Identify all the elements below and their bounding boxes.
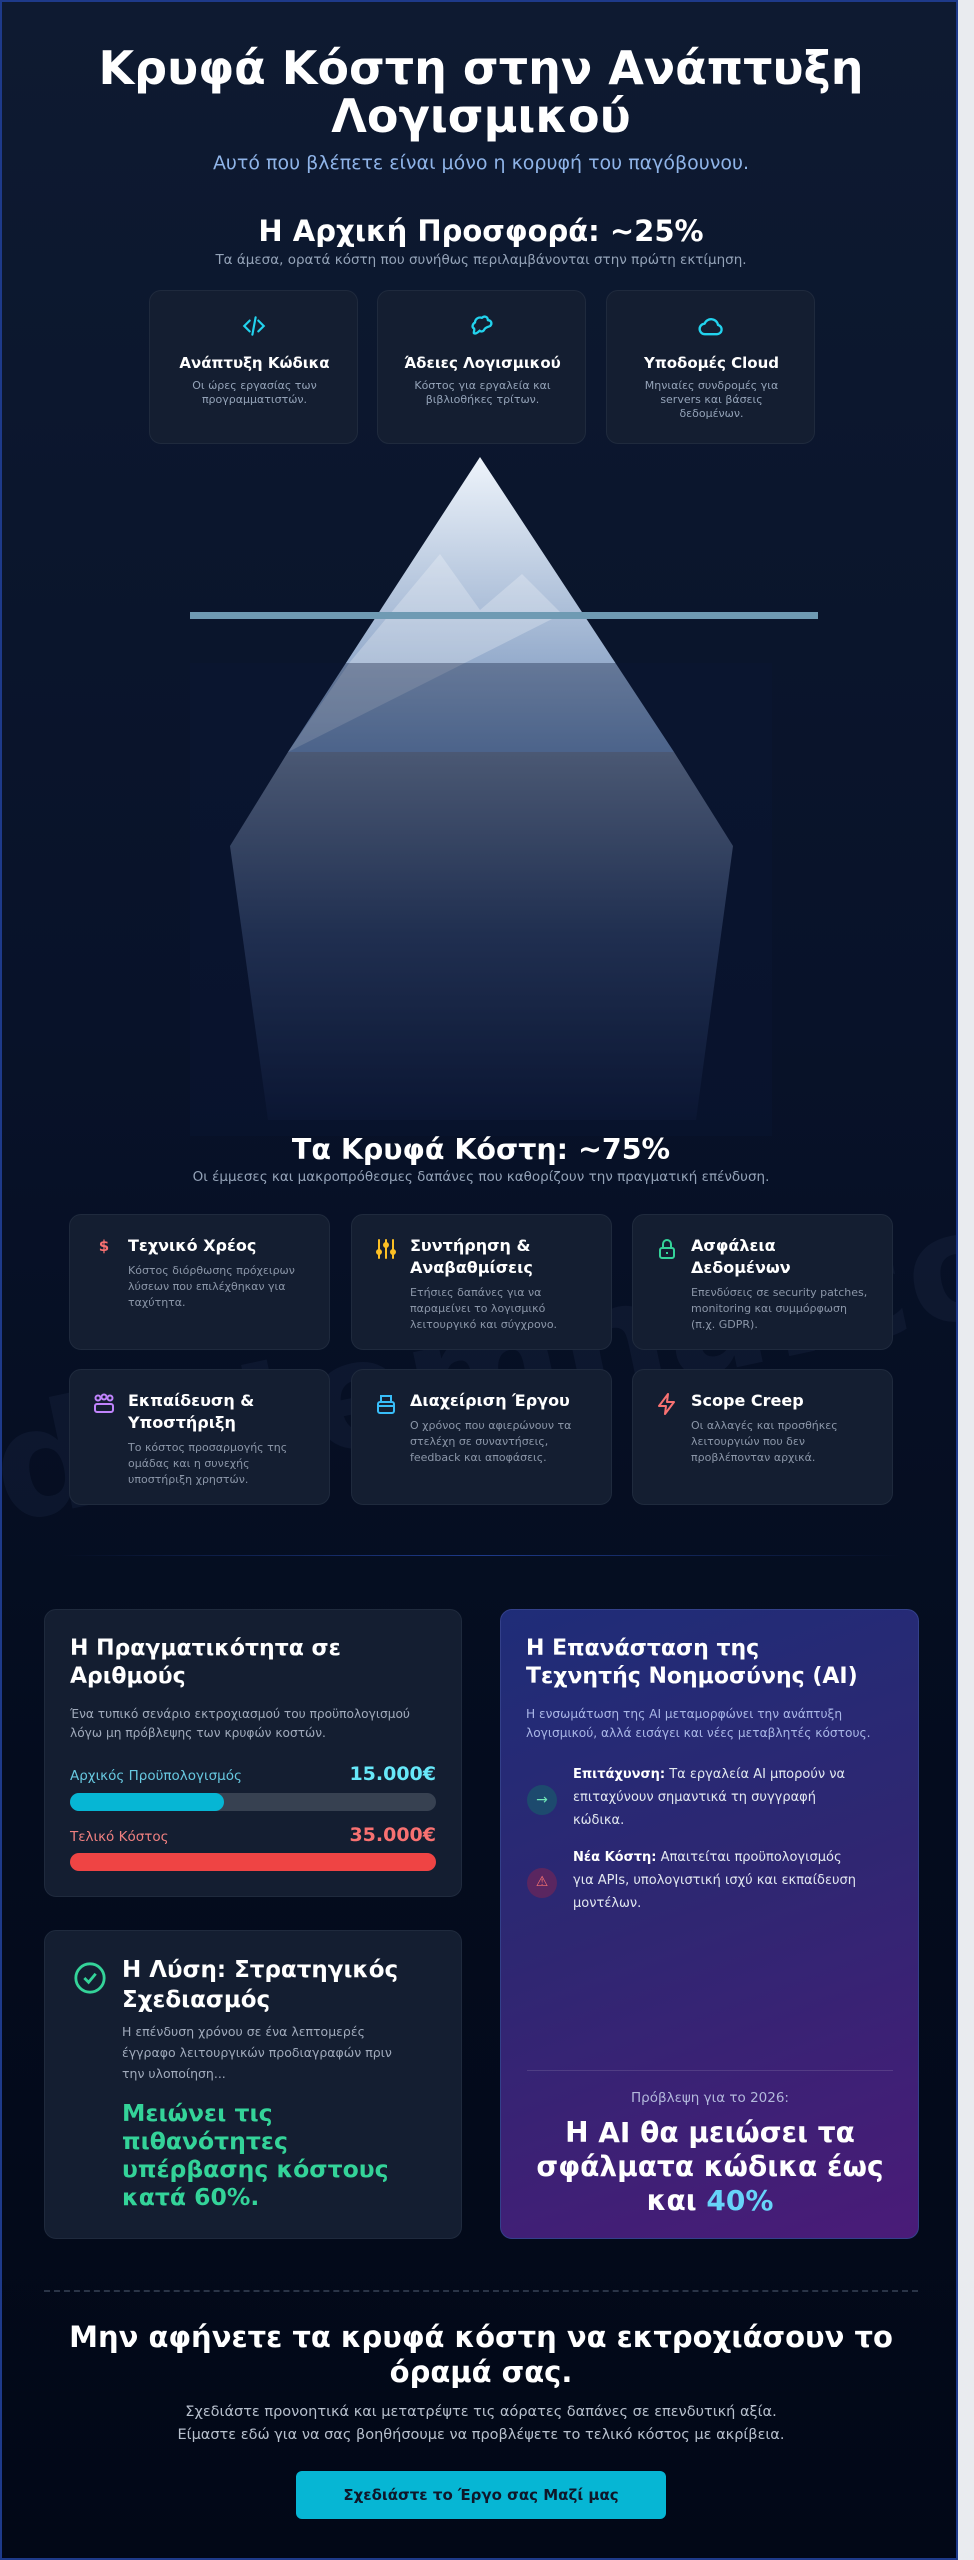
card: training: Υποστήριξη	[128, 1413, 236, 1432]
panel: visible costs cards	[149, 290, 815, 444]
card: technical debt: Κόστος διόρθωσης πρόχειρων	[128, 1264, 295, 1277]
card: project management: feedback και αποφάσεις.	[410, 1451, 547, 1464]
card: technical debt: λύσεων που επιλέχθηκαν για	[128, 1280, 286, 1293]
card: code: Οι ώρες εργασίας των προγραμματιστών.	[192, 379, 317, 406]
item: acceleration: Επιτάχυνση: Τα εργαλεία AI μπορούν να	[573, 1767, 845, 1782]
panel: solution: Μειώνει τις	[122, 2099, 273, 2127]
panel: solution: Σχεδιασμός	[122, 1987, 270, 2013]
heading: CTA: Μην αφήνετε τα κρυφά κόστη να εκτροχιάσουν το όραμά σας.	[69, 2320, 893, 2389]
card: training: υποστήριξη χρηστών.	[128, 1473, 248, 1486]
icon: check circle	[74, 1962, 106, 1994]
card: training	[69, 1369, 330, 1505]
title: Λογισμικού	[331, 89, 631, 143]
icon: box	[377, 1395, 395, 1414]
panel: reality in numbers	[44, 1609, 462, 1897]
card: project management	[351, 1369, 612, 1505]
panel: reality in numbers: Η Πραγματικότητα σε	[70, 1636, 341, 1661]
card: maintenance: Αναβαθμίσεις	[410, 1258, 533, 1277]
card: scope creep	[632, 1369, 893, 1505]
panel: AI revolution: λογισμικού, αλλά εισάγει και νέες μεταβλητές κόστους.	[526, 1726, 871, 1740]
card: maintenance: παραμείνει το λογισμικό	[410, 1302, 545, 1315]
card: security: Επενδύσεις σε security patches,	[691, 1286, 867, 1299]
icon: code	[242, 316, 266, 336]
text: CTA sub	[178, 2404, 784, 2443]
chart: iceberg	[190, 457, 818, 1120]
panel: hidden costs grid	[69, 1214, 893, 1505]
button: CTA	[296, 2471, 666, 2519]
bar chart: budget	[70, 1763, 436, 1871]
item: acceleration: →	[536, 1792, 548, 1808]
text: hidden costs sub: Οι έμμεσες και μακροπρόθεσμες δαπάνες που καθορίζουν την πραγματική επένδυση.	[193, 1169, 769, 1185]
panel: solution: υπέρβασης κόστους	[122, 2155, 389, 2183]
item: new costs: ⚠	[536, 1874, 548, 1890]
icon: users	[94, 1394, 114, 1413]
bar chart: budget: 15.000€	[349, 1763, 436, 1785]
card: technical debt	[69, 1214, 330, 1350]
text: CTA sub: Σχεδιάστε προνοητικά και μετατρέψτε τις αόρατες δαπάνες σε επενδυτική αξία.	[185, 2404, 777, 2420]
card: scope creep: Scope Creep	[691, 1391, 804, 1410]
item: acceleration: επιταχύνουν σημαντικά τη συγγραφή	[573, 1790, 816, 1805]
item: new costs: μοντέλων.	[573, 1896, 641, 1911]
panel: AI revolution: Η ενσωμάτωση της AI μεταμορφώνει την ανάπτυξη	[526, 1707, 842, 1721]
card: cloud: Μηνιαίες συνδρομές για servers και βάσεις δεδομένων.	[645, 379, 778, 420]
panel: reality in numbers: Ένα τυπικό σενάριο εκτροχιασμού του προϋπολογισμού	[70, 1707, 410, 1721]
card: project management: στελέχη σε συναντήσεις,	[410, 1435, 548, 1448]
card: maintenance: Ετήσιες δαπάνες για να	[410, 1286, 541, 1299]
button: CTA: Σχεδιάστε το Έργο σας Μαζί μας	[343, 2486, 619, 2504]
card: cloud: Υποδομές Cloud	[644, 354, 779, 372]
text: initial offer sub: Τα άμεσα, ορατά κόστη που συνήθως περιλαμβάνονται στην πρώτη εκτίμηση.	[215, 252, 747, 268]
card: licenses: Άδειες Λογισμικού	[404, 354, 561, 372]
item: acceleration	[527, 1767, 845, 1828]
subtitle: Αυτό που βλέπετε είναι μόνο η κορυφή του παγόβουνου.	[213, 152, 749, 174]
card: security	[632, 1214, 893, 1350]
card: licenses	[377, 290, 586, 444]
card: security: Ασφάλεια	[691, 1236, 776, 1255]
heading: hidden costs: Τα Κρυφά Κόστη: ~75%	[292, 1133, 670, 1166]
bar chart: budget: Τελικό Κόστος	[70, 1829, 169, 1845]
card: security: (π.χ. GDPR).	[691, 1318, 758, 1331]
icon: dollar: $	[99, 1237, 109, 1255]
callout: 2026 prediction: Η AI θα μειώσει τα σφάλματα κώδικα έως και 40%	[536, 2116, 884, 2217]
title	[98, 41, 863, 143]
callout: 2026 prediction: Πρόβλεψη για το 2026:	[631, 2090, 789, 2106]
panel: solution: την υλοποίηση...	[122, 2066, 226, 2081]
panel: solution: κατά 60%.	[122, 2183, 259, 2211]
card: code	[149, 290, 358, 444]
card: licenses: Κόστος για εργαλεία και βιβλιοθήκες τρίτων.	[414, 379, 551, 406]
card: project management: Διαχείριση Έργου	[410, 1391, 570, 1410]
bar chart: budget: Αρχικός Προϋπολογισμός	[70, 1768, 242, 1784]
card: scope creep: λειτουργιών που δεν	[691, 1435, 805, 1448]
panel: solution	[44, 1930, 462, 2239]
icon: bolt	[658, 1393, 675, 1415]
card: security: Δεδομένων	[691, 1258, 791, 1277]
icon: puzzle	[471, 315, 493, 335]
icon: sliders	[376, 1239, 396, 1259]
title: Κρυφά Κόστη στην Ανάπτυξη	[98, 41, 863, 95]
card: technical debt: Τεχνικό Χρέος	[128, 1236, 256, 1255]
panel: AI revolution	[500, 1609, 919, 2239]
panel: solution: πιθανότητες	[122, 2127, 288, 2155]
card: training: Εκπαίδευση &	[128, 1391, 254, 1410]
text: CTA sub: Είμαστε εδώ για να σας βοηθήσουμε να προβλέψετε το τελικό κόστος με ακρίβεια.	[178, 2427, 784, 2443]
card: maintenance	[351, 1214, 612, 1350]
card: training: Το κόστος προσαρμογής της	[128, 1441, 287, 1454]
panel: reality in numbers: Αριθμούς	[70, 1664, 186, 1689]
item: new costs: Νέα Κόστη: Απαιτείται προϋπολογισμός	[573, 1850, 842, 1865]
card: security: monitoring και συμμόρφωση	[691, 1302, 847, 1315]
card: maintenance: λειτουργικό και σύγχρονο.	[410, 1318, 557, 1331]
icon: lock	[659, 1239, 675, 1259]
panel: AI revolution: Η Επανάσταση της	[526, 1636, 759, 1661]
icon: cloud	[698, 318, 723, 336]
heading: initial offer: Η Αρχική Προσφορά: ~25%	[258, 214, 704, 248]
card: project management: Ο χρόνος που αφιερώνουν τα	[410, 1419, 571, 1432]
panel: reality in numbers: λόγω μη πρόβλεψης των κρυφών κοστών.	[70, 1726, 326, 1740]
panel: solution: έγγραφο λειτουργικών προδιαγραφών πριν	[122, 2045, 392, 2060]
card: code: Ανάπτυξη Κώδικα	[179, 354, 330, 372]
item: new costs: για APIs, υπολογιστική ισχύ και εκπαίδευση	[573, 1873, 856, 1888]
card: technical debt: ταχύτητα.	[128, 1296, 186, 1309]
card: scope creep: προβλέπονταν αρχικά.	[691, 1451, 815, 1464]
card: maintenance: Συντήρηση &	[410, 1236, 530, 1255]
bar chart: budget: 35.000€	[349, 1824, 436, 1846]
card: training: ομάδας και η συνεχής	[128, 1457, 250, 1470]
panel: AI revolution: Τεχνητής Νοημοσύνης (AI)	[526, 1664, 858, 1689]
item: acceleration: κώδικα.	[573, 1813, 624, 1828]
card: cloud	[606, 290, 815, 444]
panel: solution: Η επένδυση χρόνου σε ένα λεπτομερές	[122, 2024, 365, 2039]
item: new costs	[527, 1850, 856, 1911]
card: scope creep: Οι αλλαγές και προσθήκες	[691, 1419, 838, 1432]
panel: solution: Η Λύση: Στρατηγικός	[122, 1957, 398, 1983]
